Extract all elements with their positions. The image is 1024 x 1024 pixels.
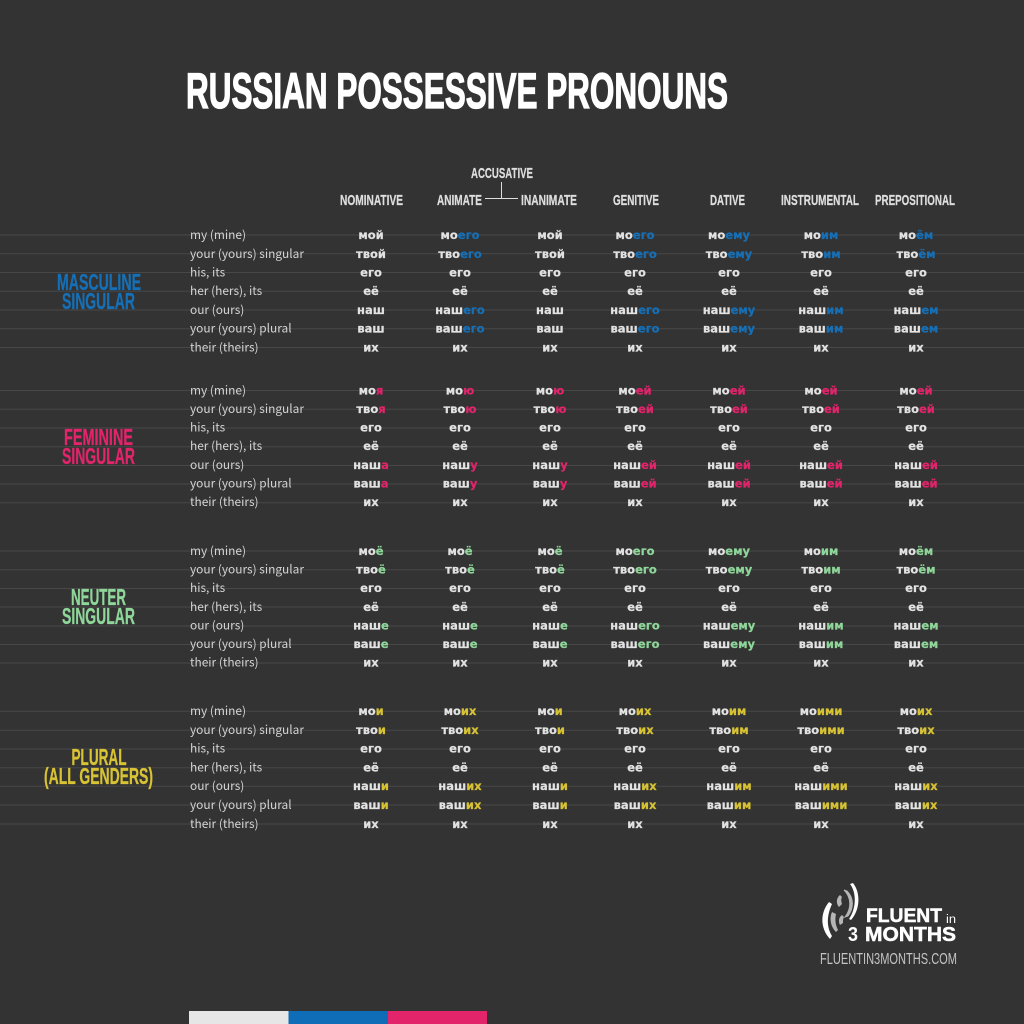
row: their (theirs): их [813, 656, 829, 670]
row: his, its: его [539, 420, 561, 434]
row: his, its: его [360, 420, 382, 434]
row: my (mine): моей [618, 384, 652, 398]
row: their (theirs) [190, 654, 924, 670]
row: her (hers), its: её [813, 760, 829, 774]
heading: plural all genders: PLURAL [72, 744, 126, 770]
row: your (yours) plural: вашим [799, 322, 843, 336]
row: your (yours) singular: your (yours) singular [190, 721, 304, 738]
row: my (mine) [190, 702, 933, 719]
row: my (mine): моим [804, 544, 838, 558]
heading: neuter singular: NEUTER [71, 584, 126, 610]
row: your (yours) singular: твой [535, 247, 565, 261]
row: my (mine): моему [708, 228, 751, 242]
row: your (yours) plural [190, 320, 938, 336]
row: our (ours): нашем [893, 303, 939, 317]
row: your (yours) singular: твоего [438, 247, 482, 261]
row: her (hers), its: её [908, 760, 924, 774]
header: genitive: GENITIVE [613, 192, 659, 209]
row: my (mine): моими [800, 704, 842, 718]
heading: masculine singular [57, 269, 141, 314]
title: RUSSIAN POSSESSIVE PRONOUNS [186, 63, 728, 119]
row: his, its: его [810, 742, 832, 756]
row: our (ours): нашего [610, 303, 660, 317]
row: her (hers), its: её [363, 439, 379, 453]
row: my (mine): мою [536, 384, 564, 398]
row: her (hers), its: её [363, 600, 379, 614]
row: her (hers), its: её [627, 600, 643, 614]
row: your (yours) plural: вашего [436, 322, 485, 336]
row: our (ours): наш [536, 303, 564, 317]
row: our (ours): наше [532, 618, 568, 632]
row: your (yours) plural: вашему [703, 322, 755, 336]
row: our (ours): наши [532, 779, 568, 793]
row: our (ours): нашими [794, 779, 848, 793]
row: your (yours) singular: твоих [441, 723, 479, 737]
heading: feminine singular: FEMININE [64, 424, 133, 450]
row: her (hers), its: её [627, 439, 643, 453]
accusative connector [485, 182, 518, 198]
row: your (yours) plural [190, 635, 938, 652]
column headers [340, 165, 955, 209]
row: his, its: его [539, 581, 561, 595]
row: your (yours) singular: твоим [709, 723, 749, 737]
row: your (yours) singular [190, 245, 936, 262]
row: your (yours) singular: твои [356, 723, 386, 737]
row: his, its [190, 740, 927, 756]
row: your (yours) plural: ваша [353, 476, 389, 490]
website url: FLUENTIN3MONTHS.COM [820, 951, 957, 968]
wordmark: FLUENT [866, 906, 942, 927]
row: his, its: his, its [190, 418, 226, 436]
row: our (ours): нашим [706, 779, 752, 793]
row: your (yours) plural: ваши [353, 798, 389, 812]
row: their (theirs): их [908, 817, 924, 831]
row: our (ours): наше [353, 618, 389, 632]
row: their (theirs): их [452, 495, 468, 509]
row: his, its: его [718, 742, 740, 756]
row: your (yours) singular [190, 560, 936, 578]
row: my (mine) [190, 542, 933, 559]
row: my (mine): мои [358, 704, 384, 718]
wordmark [848, 906, 956, 946]
row: my (mine): моё [537, 544, 563, 558]
row: his, its: его [905, 266, 927, 280]
row: their (theirs): их [721, 817, 737, 831]
row: our (ours): наш [357, 303, 385, 317]
panel: plural all genders [44, 702, 938, 832]
row: your (yours) plural: ваших [614, 798, 657, 812]
row: my (mine): my (mine) [190, 542, 246, 559]
row: our (ours): our (ours) [190, 616, 244, 634]
row: your (yours) singular: твоих [616, 723, 654, 737]
row: his, its [190, 418, 927, 436]
header: animate: ANIMATE [437, 192, 482, 209]
row: your (yours) singular: твой [356, 247, 386, 261]
row: his, its: его [624, 420, 646, 434]
row: my (mine): мои [537, 704, 563, 718]
row: his, its: его [718, 420, 740, 434]
row: your (yours) plural: вашу [533, 476, 568, 490]
row: your (yours) singular: your (yours) singular [190, 560, 304, 578]
row: your (yours) plural: your (yours) plural [190, 320, 292, 336]
row: his, its: его [718, 266, 740, 280]
row: her (hers), its: её [721, 760, 737, 774]
row: their (theirs): их [721, 495, 737, 509]
row: our (ours): our (ours) [190, 301, 244, 318]
header: accusative: ACCUSATIVE [471, 165, 533, 182]
row: your (yours) plural: ваше [353, 637, 389, 651]
row: her (hers), its: её [363, 284, 379, 298]
row: your (yours) singular: твоему [706, 562, 753, 576]
row: your (yours) singular: твоё [356, 562, 386, 576]
row: her (hers), its: её [908, 600, 924, 614]
row: your (yours) singular: твоей [802, 402, 840, 416]
row: our (ours): our (ours) [190, 456, 244, 473]
row: her (hers), its: her (hers), its [190, 282, 263, 299]
row: my (mine): моя [359, 384, 383, 398]
row: your (yours) singular: твоём [896, 247, 936, 261]
heading: plural all genders: (ALL GENDERS) [44, 763, 153, 789]
row: your (yours) singular: твоё [445, 562, 475, 576]
panel: masculine singular [57, 226, 939, 356]
row: her (hers), its: её [813, 439, 829, 453]
row: my (mine): моих [619, 704, 652, 718]
row: our (ours): нашего [435, 303, 485, 317]
wordmark: 3 [848, 924, 858, 946]
row: her (hers), its [190, 598, 924, 615]
row: my (mine): моим [712, 704, 746, 718]
heading: plural all genders [44, 744, 153, 789]
row: our (ours) [190, 456, 938, 473]
row: their (theirs): их [627, 656, 643, 670]
row: our (ours): нашу [532, 458, 568, 472]
row: your (yours) singular: твои [535, 723, 565, 737]
row: your (yours) singular: твоей [616, 402, 654, 416]
wordmark: in [946, 914, 956, 926]
row: my (mine): моё [447, 544, 473, 558]
row: your (yours) singular: твоего [613, 562, 657, 576]
row: her (hers), its: её [363, 760, 379, 774]
row: our (ours): нашей [894, 458, 938, 472]
row: our (ours): нашей [799, 458, 843, 472]
row: your (yours) plural: вашему [703, 637, 755, 651]
row: your (yours) plural: вашу [443, 476, 478, 490]
row: our (ours): наша [353, 458, 389, 472]
row: your (yours) plural [190, 796, 938, 813]
row: her (hers), its: её [452, 284, 468, 298]
row: my (mine): моей [804, 384, 838, 398]
row: our (ours): нашей [613, 458, 657, 472]
row: her (hers), its: её [813, 600, 829, 614]
heading: neuter singular [62, 584, 135, 629]
row: my (mine): my (mine) [190, 226, 246, 243]
header: dative: DATIVE [710, 192, 745, 209]
row: my (mine): my (mine) [190, 382, 246, 398]
heading: neuter singular: SINGULAR [62, 603, 135, 629]
row: our (ours): нашим [798, 303, 844, 317]
row: their (theirs) [190, 815, 924, 832]
row: your (yours) plural: вашем [894, 322, 938, 336]
row: their (theirs): их [542, 817, 558, 831]
row: your (yours) singular: твою [443, 402, 477, 416]
row: their (theirs): их [542, 656, 558, 670]
row: his, its: his, its [190, 579, 226, 596]
row: their (theirs): их [363, 656, 379, 670]
row: his, its: его [360, 742, 382, 756]
row: your (yours) plural: ваше [442, 637, 478, 651]
row: her (hers), its: her (hers), its [190, 758, 263, 776]
row: your (yours) plural: вашими [795, 798, 847, 812]
row: their (theirs): их [452, 656, 468, 670]
row: our (ours): our (ours) [190, 777, 244, 794]
row: her (hers), its: её [452, 600, 468, 614]
row: your (yours) singular: your (yours) singular [190, 400, 304, 417]
row: his, its [190, 579, 927, 596]
row: our (ours) [190, 616, 939, 634]
icon: sound waves [822, 883, 858, 939]
row: his, its: его [905, 581, 927, 595]
row: her (hers), its [190, 282, 924, 299]
row: his, its: его [360, 581, 382, 595]
row: my (mine): моим [804, 228, 838, 242]
row: your (yours) plural: вашей [894, 476, 938, 490]
row: their (theirs): их [721, 340, 737, 354]
panel: feminine singular [62, 382, 938, 510]
row: our (ours) [190, 301, 939, 318]
row: our (ours): нашей [707, 458, 751, 472]
row: your (yours) plural: your (yours) plural [190, 474, 292, 492]
row: my (mine): моё [358, 544, 384, 558]
row: your (yours) plural: ваш [536, 322, 564, 336]
row: her (hers), its [190, 437, 924, 454]
row: my (mine): my (mine) [190, 702, 246, 719]
row: your (yours) plural: ваш [357, 322, 385, 336]
heading: feminine singular [62, 424, 135, 469]
row: your (yours) plural: ваши [532, 798, 568, 812]
row: your (yours) singular: твоему [706, 247, 753, 261]
row: their (theirs): их [363, 340, 379, 354]
row: their (theirs): их [908, 495, 924, 509]
row: their (theirs): их [452, 340, 468, 354]
row: our (ours): наших [894, 779, 938, 793]
row: her (hers), its: её [813, 284, 829, 298]
row: your (yours) singular: твою [533, 402, 567, 416]
row: their (theirs): their (theirs) [190, 338, 259, 356]
row: his, its: его [449, 581, 471, 595]
heading: feminine singular: SINGULAR [62, 443, 135, 469]
row: her (hers), its: её [542, 760, 558, 774]
header: prepositional: PREPOSITIONAL [875, 192, 955, 209]
row: your (yours) plural: вашей [707, 476, 751, 490]
row: their (theirs): their (theirs) [190, 493, 259, 510]
row: your (yours) plural: вашим [707, 798, 751, 812]
heading: masculine singular: MASCULINE [57, 269, 141, 295]
row: her (hers), its: её [908, 284, 924, 298]
row: their (theirs): their (theirs) [190, 815, 259, 832]
row: their (theirs): their (theirs) [190, 654, 259, 670]
row: your (yours) singular: your (yours) singular [190, 245, 304, 262]
row: their (theirs): их [542, 340, 558, 354]
row: our (ours): нашем [893, 618, 939, 632]
row: their (theirs): их [908, 656, 924, 670]
row: your (yours) singular: твоих [897, 723, 935, 737]
row: his, its: his, its [190, 264, 226, 280]
row: our (ours): нашего [610, 618, 660, 632]
row: my (mine): моём [899, 544, 933, 558]
row: your (yours) plural: ваших [439, 798, 482, 812]
row: their (theirs): их [627, 495, 643, 509]
row: my (mine): моего [615, 228, 655, 242]
row: his, its: его [905, 420, 927, 434]
row: our (ours): нашим [798, 618, 844, 632]
row: your (yours) singular: твоя [356, 402, 386, 416]
wordmark: MONTHS [865, 924, 956, 946]
panel: neuter singular [62, 542, 939, 670]
header: nominative: NOMINATIVE [340, 192, 403, 209]
row: his, its: его [449, 266, 471, 280]
row: his, its: его [539, 266, 561, 280]
row: my (mine): моих [444, 704, 477, 718]
row: my (mine) [190, 226, 933, 243]
row: their (theirs): их [908, 340, 924, 354]
row: her (hers), its: her (hers), its [190, 437, 263, 454]
row: his, its: его [810, 266, 832, 280]
row: their (theirs): их [363, 495, 379, 509]
row: his, its: его [624, 581, 646, 595]
row: your (yours) singular [190, 400, 935, 417]
row: my (mine): мой [537, 228, 563, 242]
row: your (yours) plural: вашего [611, 322, 660, 336]
row: her (hers), its: её [542, 284, 558, 298]
row: their (theirs): их [721, 656, 737, 670]
row: his, its: his, its [190, 740, 226, 756]
row: his, its: его [624, 742, 646, 756]
row: our (ours) [190, 777, 938, 794]
row: his, its [190, 264, 927, 280]
row: their (theirs): их [813, 495, 829, 509]
row: your (yours) singular [190, 721, 935, 738]
row: our (ours): наших [613, 779, 657, 793]
logo: Fluent in 3 Months [820, 883, 957, 968]
row: my (mine): моему [708, 544, 751, 558]
row: his, its: его [905, 742, 927, 756]
row: his, its: его [810, 420, 832, 434]
row: your (yours) singular: твоей [710, 402, 748, 416]
row: her (hers), its: её [721, 284, 737, 298]
row: my (mine): моих [900, 704, 933, 718]
row: our (ours): нашему [703, 303, 756, 317]
row: your (yours) singular: твоим [801, 247, 841, 261]
row: our (ours): наши [353, 779, 389, 793]
row: their (theirs): их [813, 340, 829, 354]
row: their (theirs): их [363, 817, 379, 831]
row: our (ours): наших [438, 779, 482, 793]
row: her (hers), its: её [721, 439, 737, 453]
row: our (ours): нашему [703, 618, 756, 632]
row: her (hers), its [190, 758, 924, 776]
row: your (yours) singular: твоего [613, 247, 657, 261]
row: your (yours) plural: вашим [799, 637, 843, 651]
row: your (yours) plural: your (yours) plural [190, 635, 292, 652]
row: his, its: его [360, 266, 382, 280]
header: inanimate: INANIMATE [521, 192, 577, 209]
heading: masculine singular: SINGULAR [62, 288, 135, 314]
row: her (hers), its: её [721, 600, 737, 614]
row: her (hers), its: её [452, 760, 468, 774]
row: my (mine): моём [899, 228, 933, 242]
row: your (yours) singular: твоими [797, 723, 845, 737]
row: her (hers), its: её [908, 439, 924, 453]
row: his, its: его [810, 581, 832, 595]
row: his, its: его [624, 266, 646, 280]
row: your (yours) singular: твоё [535, 562, 565, 576]
row: my (mine): мой [358, 228, 384, 242]
row: their (theirs): их [452, 817, 468, 831]
row: his, its: его [718, 581, 740, 595]
row: your (yours) singular: твоей [897, 402, 935, 416]
row: their (theirs) [190, 493, 924, 510]
row: your (yours) singular: твоим [801, 562, 841, 576]
row: their (theirs): их [813, 817, 829, 831]
row: their (theirs): их [542, 495, 558, 509]
row: your (yours) plural: your (yours) plural [190, 796, 292, 813]
row: his, its: его [449, 742, 471, 756]
row: your (yours) plural: ваше [532, 637, 568, 651]
row: my (mine): моего [615, 544, 655, 558]
row: your (yours) plural: вашего [611, 637, 660, 651]
row: your (yours) plural: вашем [894, 637, 938, 651]
row: your (yours) singular: твоём [896, 562, 936, 576]
row: her (hers), its: её [452, 439, 468, 453]
row: her (hers), its: её [542, 600, 558, 614]
row: your (yours) plural: вашей [613, 476, 657, 490]
row: their (theirs): их [627, 817, 643, 831]
row: her (hers), its: её [542, 439, 558, 453]
row: our (ours): нашу [442, 458, 478, 472]
row: your (yours) plural: ваших [895, 798, 938, 812]
row: her (hers), its: её [627, 760, 643, 774]
row: my (mine): моей [712, 384, 746, 398]
row: their (theirs) [190, 338, 924, 356]
row: her (hers), its: её [627, 284, 643, 298]
row: your (yours) plural [190, 474, 938, 492]
header: instrumental: INSTRUMENTAL [781, 192, 859, 209]
row: my (mine) [190, 382, 933, 398]
row: his, its: его [449, 420, 471, 434]
row: his, its: его [539, 742, 561, 756]
row: her (hers), its: her (hers), its [190, 598, 263, 615]
row: my (mine): моей [899, 384, 933, 398]
flag colour bar [189, 1011, 487, 1024]
row: their (theirs): их [627, 340, 643, 354]
row: my (mine): мою [446, 384, 474, 398]
row: our (ours): наше [442, 618, 478, 632]
row: your (yours) plural: вашей [799, 476, 843, 490]
row: my (mine): моего [440, 228, 480, 242]
